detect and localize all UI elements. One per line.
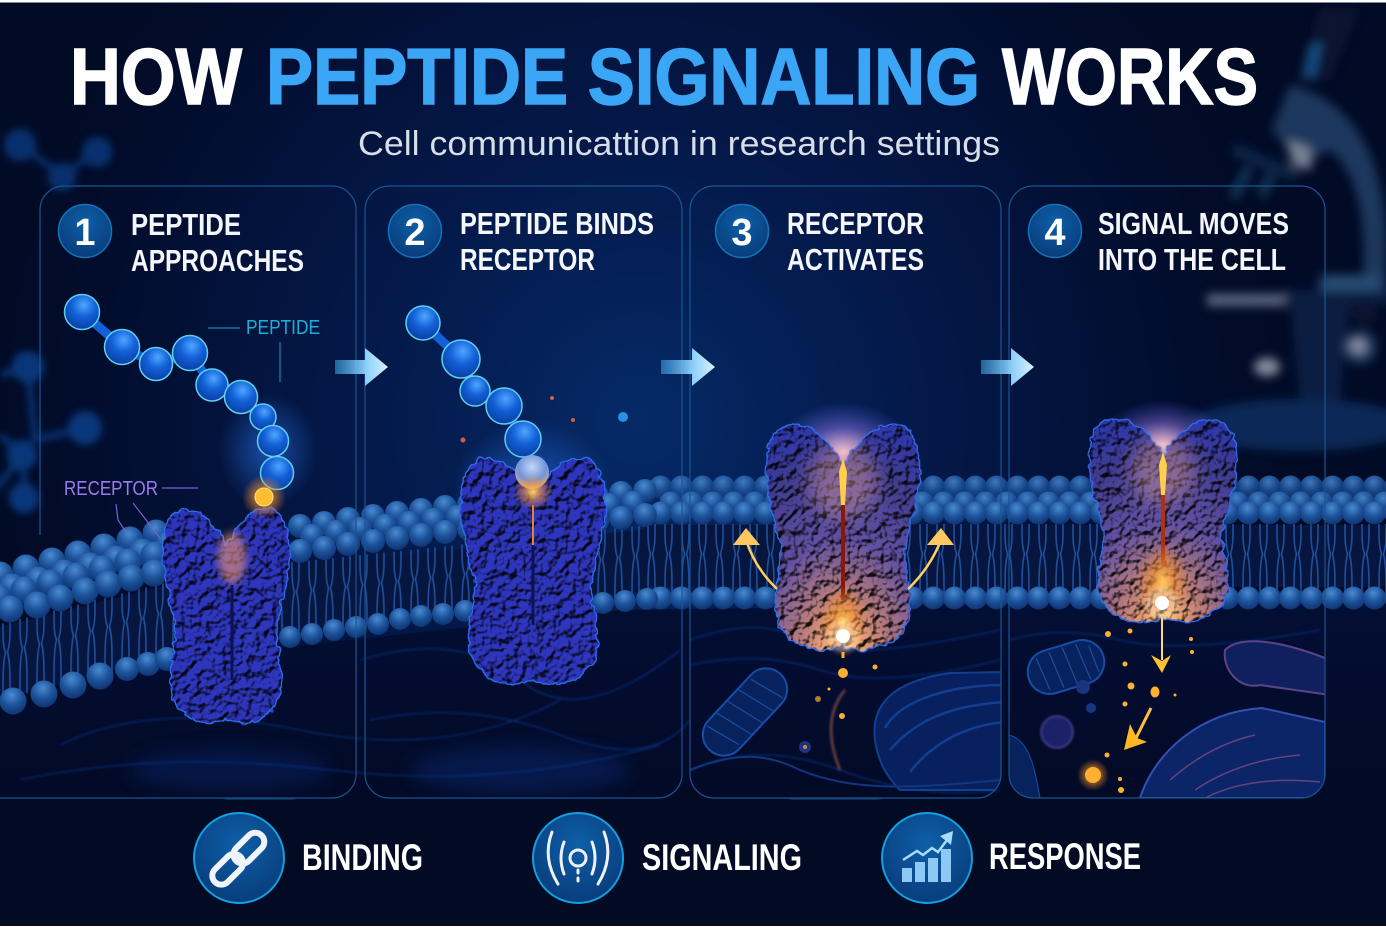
panel 1 outline xyxy=(0,186,356,798)
step 2 heading: RECEPTOR xyxy=(460,242,595,277)
step 1 heading xyxy=(58,204,304,278)
step 4 heading: SIGNAL MOVES xyxy=(1098,206,1289,241)
cell scene xyxy=(0,475,1386,798)
step 1 heading: PEPTIDE xyxy=(131,207,241,242)
title: WORKS xyxy=(1002,32,1258,121)
subtitle: Cell communicattion in research settings xyxy=(358,125,1000,163)
step 2 heading: PEPTIDE BINDS xyxy=(460,206,654,241)
golgi organelle xyxy=(874,672,1010,790)
icon: broadcast xyxy=(548,832,608,884)
receptor 3 xyxy=(767,402,919,658)
label: receptor xyxy=(64,478,198,538)
bottom glow accents xyxy=(225,796,880,799)
legend: signaling xyxy=(533,813,802,903)
legend: response: RESPONSE xyxy=(989,836,1141,877)
step 2 heading xyxy=(388,204,654,277)
panel 2 outline xyxy=(365,186,682,798)
icon: chain link xyxy=(209,829,268,888)
step 3 heading: ACTIVATES xyxy=(787,242,924,277)
legend: binding xyxy=(194,813,423,903)
step 3 heading xyxy=(716,204,924,277)
nucleus xyxy=(1140,708,1325,798)
peptide 2 xyxy=(406,306,628,510)
step 3 heading: 3 xyxy=(731,212,753,254)
legend: signaling: SIGNALING xyxy=(642,837,802,878)
tails xyxy=(0,524,1386,700)
cytoplasm xyxy=(0,600,1386,798)
step 4 heading: INTO THE CELL xyxy=(1098,242,1286,277)
organelles panel 3 xyxy=(690,660,1010,790)
title xyxy=(70,32,1258,121)
panel 4 outline xyxy=(1009,186,1325,798)
sloped rows middle xyxy=(279,479,658,648)
title: PEPTIDE SIGNALING xyxy=(266,32,980,121)
label: receptor: RECEPTOR xyxy=(64,478,158,500)
organelles panel 4 xyxy=(1009,635,1330,798)
mitochondrion xyxy=(702,667,788,757)
signal particles panel 4 xyxy=(1077,587,1194,793)
small vesicle xyxy=(1041,716,1073,748)
legend: response xyxy=(882,813,1141,903)
step 4 heading xyxy=(1028,204,1289,277)
arrow 1 to 2 xyxy=(335,348,388,386)
panel outlines xyxy=(0,186,1325,798)
step 4 heading: 4 xyxy=(1044,212,1066,254)
arrow 2 to 3 xyxy=(661,348,715,386)
panel 3 outline xyxy=(690,186,1001,798)
panel step arrows xyxy=(335,348,1034,386)
receptor 4 xyxy=(1090,400,1236,622)
step 1 heading: APPROACHES xyxy=(131,243,304,278)
receptor 2 xyxy=(453,420,613,684)
golgi organelle xyxy=(1225,641,1330,695)
step 3 heading: RECEPTOR xyxy=(787,206,924,241)
microscope blurred xyxy=(1190,8,1386,451)
arrow: down left xyxy=(1124,708,1151,750)
signal particles panel 3 xyxy=(733,528,954,770)
arrow: right up xyxy=(908,528,954,589)
mitochondrion xyxy=(1026,639,1106,695)
flat rows xyxy=(650,475,1386,610)
label: peptide: PEPTIDE xyxy=(246,317,320,339)
step 2 heading: 2 xyxy=(404,212,426,254)
label: peptide xyxy=(208,317,320,382)
sloped rows left xyxy=(0,520,182,714)
title: HOW xyxy=(70,32,242,121)
arrow 3 to 4 xyxy=(981,348,1034,386)
icon: rising bars xyxy=(902,831,953,882)
step 1 heading: 1 xyxy=(74,212,96,254)
peptide 1 xyxy=(64,294,318,519)
lipid membrane xyxy=(0,475,1386,714)
arrow: down xyxy=(1151,617,1171,673)
arrow: left up xyxy=(733,528,777,589)
receptor 1 xyxy=(163,509,289,722)
molecule: top left blurred xyxy=(7,132,109,188)
legend: binding: BINDING xyxy=(302,837,423,878)
molecule: left blurred xyxy=(0,354,99,510)
